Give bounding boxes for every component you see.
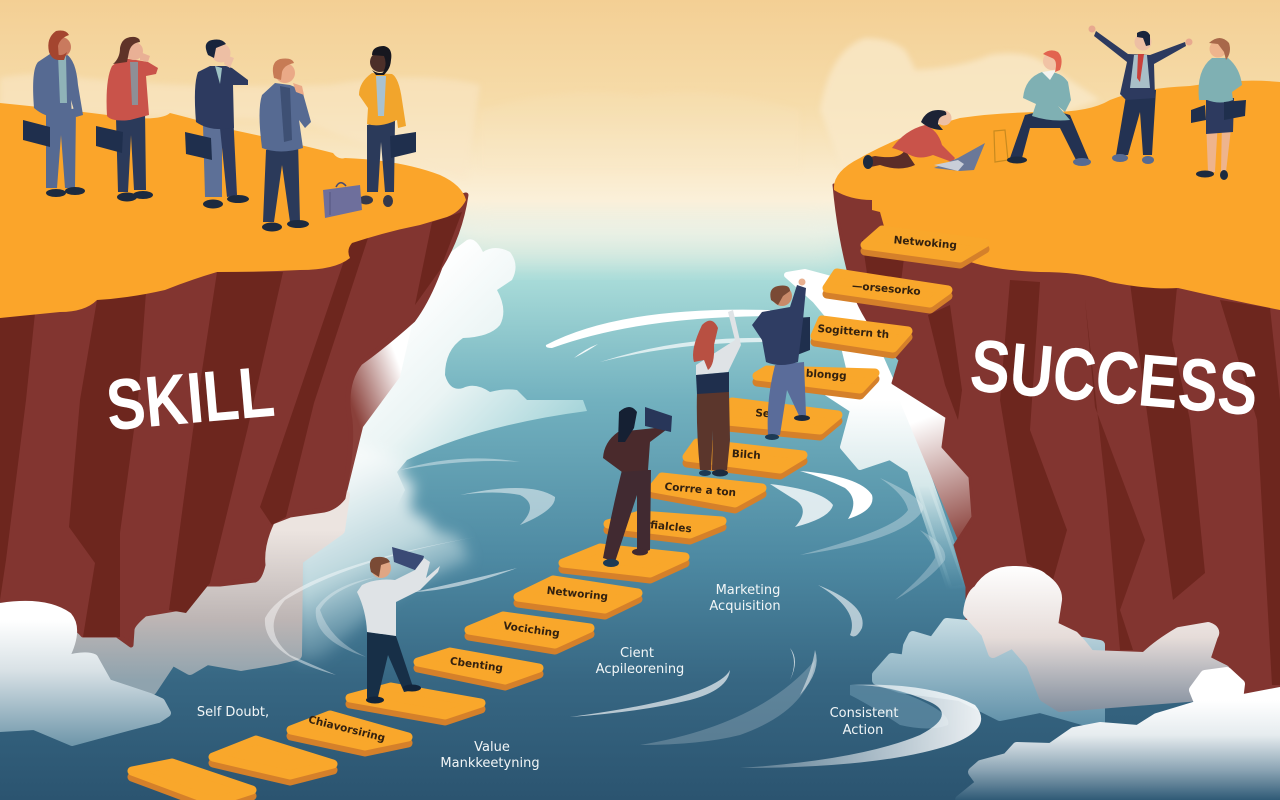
right cliff rock: [834, 185, 1280, 700]
stone 9: [608, 515, 722, 540]
stone 8: [563, 548, 685, 579]
stepping stones: [132, 230, 985, 800]
person: standing man 1: [23, 30, 85, 197]
fog: mid left of chasm: [290, 440, 470, 660]
stone 7: Networing: [546, 585, 609, 603]
stone 15: —orsesorko: [851, 280, 921, 298]
stone 15: [827, 273, 948, 309]
label: value marketing: Mankkeetyning: [440, 756, 540, 771]
title: SKILL: SKILL: [103, 352, 278, 446]
white bottom cloud: [960, 672, 1280, 800]
person: standing woman 2: [96, 37, 158, 201]
person: seated person in teal: [1007, 50, 1091, 166]
blue cloud: [877, 623, 1100, 725]
mist band over water horizon: [460, 215, 840, 265]
warm white cloud: [968, 571, 1225, 707]
stone 14: [815, 320, 908, 354]
stone 3: Chiavorsiring: [307, 714, 386, 744]
person: thinking man 4: [260, 58, 311, 232]
consistent action swirl: [740, 685, 981, 768]
stone 5: Cbenting: [449, 655, 504, 675]
person: man with raised arms: [1088, 26, 1192, 164]
stone 6: [469, 616, 590, 650]
label: consistent action: Action: [843, 723, 883, 738]
person: climbing woman lower, dark outfit: [603, 407, 672, 567]
pink fade beside right rock: [893, 385, 980, 545]
stone 10: [653, 477, 762, 509]
stone 12: [717, 402, 838, 436]
stone 14: Sogittern th: [817, 323, 890, 341]
person: front man, white shirt: [357, 547, 440, 704]
stone 4: [350, 687, 481, 721]
person: woman with orange jacket 5: [359, 46, 416, 207]
left cliff rock: [0, 195, 466, 645]
left cliff facets: [0, 212, 462, 637]
cliff: success (right): [834, 81, 1280, 700]
label: value marketing: Value: [474, 740, 510, 755]
cliff: skill (left): [0, 103, 466, 645]
stone 3: [291, 714, 408, 752]
lower left grey fog: [60, 495, 345, 690]
right cliff facets: [862, 240, 1280, 685]
stone 13: blongg: [805, 368, 847, 382]
stone 16: [865, 230, 985, 264]
pink fade beside left rock: [335, 320, 413, 510]
right lower clouds: [877, 571, 1280, 800]
label: client acquisition: Acpileorening: [596, 662, 684, 677]
stone 11: [687, 443, 803, 475]
stone 5: [418, 652, 539, 686]
label: client acquisition: Cient: [620, 646, 654, 661]
stone 11: Bilch: [731, 448, 761, 462]
sky clouds: [0, 38, 1100, 190]
person: standing man 3: [185, 40, 249, 208]
icon: purple suitcase: [323, 183, 362, 218]
stone 12: Seo: [755, 407, 778, 421]
person: climbing man top: [752, 278, 810, 440]
stone 6: Vociching: [502, 620, 560, 640]
stone 2: [213, 740, 333, 781]
icon: empty outline bag: [994, 130, 1008, 162]
stone 13: [757, 368, 875, 395]
fog plume: right side of chasm: [787, 272, 967, 590]
label: consistent action: Consistent: [830, 706, 898, 721]
stone 9: rfialcles: [644, 519, 692, 535]
person: woman on laptop: [863, 110, 985, 171]
fog plume: upper left of chasm: [340, 239, 587, 510]
label: marketing acquisition: Acquisition: [709, 599, 781, 614]
stone 10: Corrre a ton: [664, 481, 736, 499]
left white puff: [0, 605, 167, 742]
right cliff top: [834, 81, 1280, 310]
stone 7: [518, 580, 638, 615]
left cliff top: [0, 103, 466, 318]
person: woman with briefcases: [1191, 38, 1246, 180]
stone 1: [132, 763, 252, 800]
label: marketing acquisition: Marketing: [716, 583, 780, 598]
stone 16: Netwoking: [893, 234, 957, 252]
water swirls: [265, 310, 945, 745]
person: climbing woman middle: [693, 310, 741, 476]
label: self doubt: Self Doubt,: [197, 705, 269, 720]
